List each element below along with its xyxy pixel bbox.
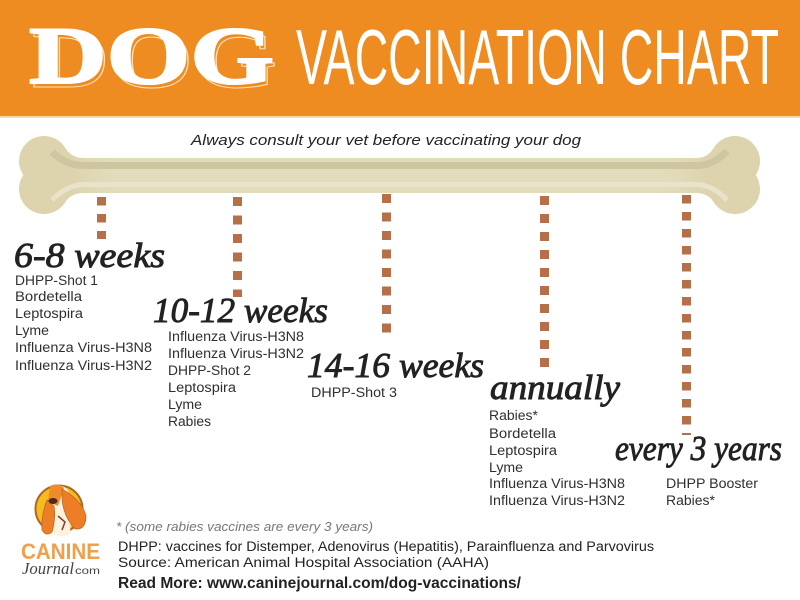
vaccine list: DHPP Booster xyxy=(666,476,759,491)
heading: every 3 years: every 3 years xyxy=(615,429,782,468)
vaccine list: Lyme xyxy=(489,460,523,475)
footnote: rabies: * (some rabies vaccines are every 3 years) xyxy=(116,520,373,534)
vaccine list: Influenza Virus-H3N2 xyxy=(15,358,152,373)
heading: annually: annually xyxy=(490,368,620,407)
vaccine list: DHPP-Shot 3 xyxy=(311,385,397,400)
vaccine list: Leptospira xyxy=(489,443,558,458)
vaccine list: Rabies* xyxy=(666,493,716,508)
vaccine list: Bordetella xyxy=(15,289,83,304)
dotted connector: every 3 years xyxy=(682,195,691,435)
vaccine list xyxy=(666,476,759,508)
vaccine list: Bordetella xyxy=(489,426,557,441)
vaccine list xyxy=(168,329,304,429)
heading: 6-8 weeks: 6-8 weeks xyxy=(14,236,165,275)
title: DOG: DOG xyxy=(32,14,277,105)
vaccine list: Influenza Virus-H3N8 xyxy=(168,329,304,344)
vaccine list: Rabies xyxy=(168,414,211,429)
vaccine list: Leptospira xyxy=(15,306,84,321)
footnotes xyxy=(116,520,654,592)
vaccine list: Influenza Virus-H3N2 xyxy=(168,346,304,361)
title: DOG: DOG xyxy=(29,10,274,101)
dotted connector: 10-12 weeks xyxy=(233,197,242,297)
definition: DHPP: DHPP: vaccines for Distemper, Adenovirus (Hepatitis), Parainfluenza and Parvovirus xyxy=(118,539,654,554)
group: 6-8 weeks xyxy=(14,236,165,373)
dotted connector: annually xyxy=(540,196,549,375)
vaccine list: Rabies* xyxy=(489,408,539,423)
group: annually xyxy=(489,368,625,508)
logo wordmark: Canine: CANINE xyxy=(21,539,100,564)
logo wordmark: Journal.com: com xyxy=(75,565,100,577)
group: 14-16 weeks xyxy=(307,346,484,400)
heading: 14-16 weeks: 14-16 weeks xyxy=(307,346,484,385)
icon: basset hound xyxy=(36,484,86,536)
heading: 10-12 weeks: 10-12 weeks xyxy=(153,291,328,330)
vaccine list: DHPP-Shot 2 xyxy=(168,363,251,378)
logo wordmark: Journal.com xyxy=(22,559,100,578)
vaccine list: Leptospira xyxy=(168,380,237,395)
logo: Canine Journal xyxy=(21,484,100,578)
subtitle: Always consult your vet before vaccinating your dog xyxy=(190,132,582,149)
group: every 3 years xyxy=(615,429,782,508)
vaccine list: Influenza Virus-H3N2 xyxy=(489,493,625,508)
dotted connector: 6-8 weeks xyxy=(97,197,106,239)
vaccine list: Influenza Virus-H3N8 xyxy=(489,476,625,491)
group: 10-12 weeks xyxy=(153,291,328,429)
source: Source: American Animal Hospital Association (AAHA) xyxy=(118,555,489,570)
logo wordmark: Journal.com: Journal xyxy=(22,559,74,578)
header banner xyxy=(0,0,800,118)
vaccine list: Lyme xyxy=(168,397,202,412)
bone timeline xyxy=(19,136,760,214)
vaccine list: DHPP-Shot 1 xyxy=(15,273,98,288)
vaccine list: Influenza Virus-H3N8 xyxy=(15,340,152,355)
vaccine list: Lyme xyxy=(15,323,49,338)
vaccine list xyxy=(489,408,625,508)
vaccine list xyxy=(15,273,152,373)
dotted connector: 14-16 weeks xyxy=(382,194,391,338)
read more link: Read More: www.caninejournal.com/dog-vaccinations/ xyxy=(118,575,522,592)
